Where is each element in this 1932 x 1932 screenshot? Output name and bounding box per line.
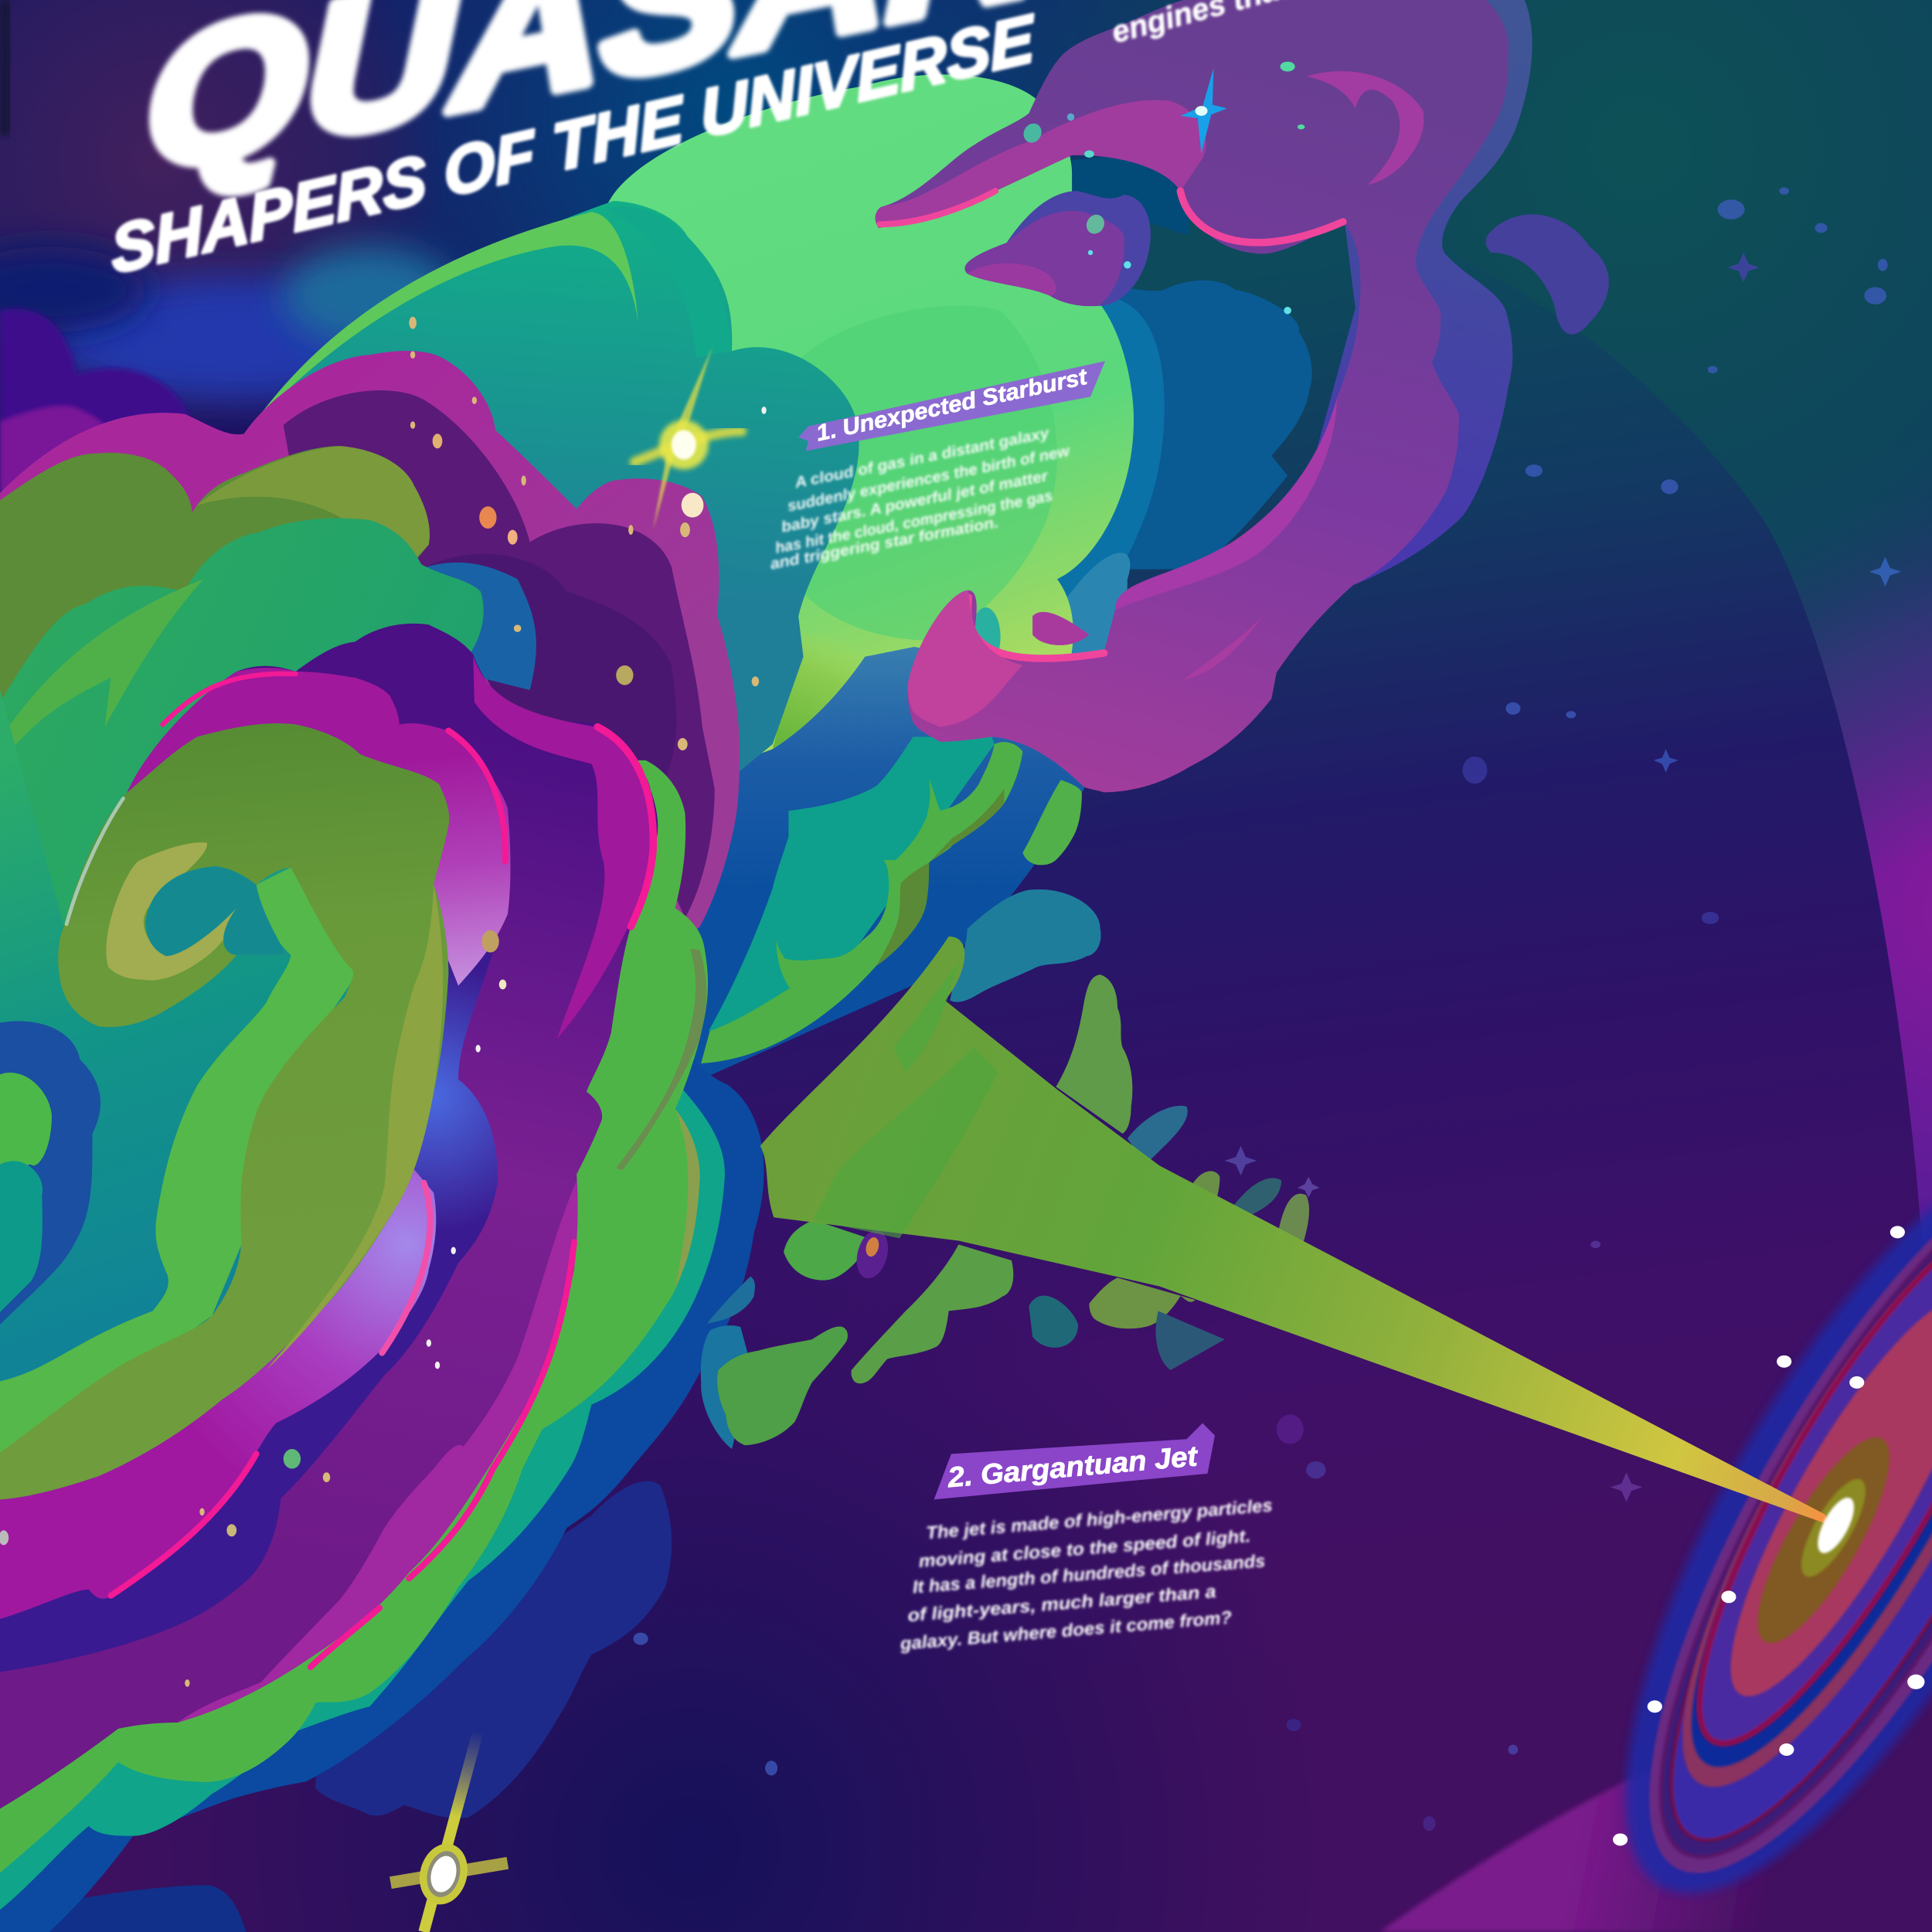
galaxy blue centre band (1637, 1190, 1932, 1804)
body text: unexpected starburst: and triggering star formation. (769, 514, 1000, 573)
cloud: small purple puff on the right (1486, 214, 1609, 335)
lower magenta ring (0, 1146, 436, 1619)
body text: gargantuan jet: galaxy. But where does it come from? (899, 1607, 1233, 1654)
crescent teal fill (709, 736, 995, 1032)
inner blue puff (0, 1021, 100, 1325)
galaxy nucleus and stars (1613, 1226, 1924, 1845)
cloud: blue haze behind title (0, 247, 456, 493)
crescent olive shadow (876, 862, 929, 966)
body text: gargantuan jet: of light-years, much larger than a (906, 1581, 1217, 1625)
subtitle: SHAPERS OF THE UNIVERSE (108, 1, 1039, 288)
scattered background stars (634, 187, 1901, 1831)
galaxy dark band (1587, 1118, 1932, 1908)
banner: gargantuan jet: 2. Gargantuan Jet (946, 1440, 1200, 1493)
icon: yellow star lower left (390, 1731, 508, 1932)
cloud: teal inner cloud (263, 201, 859, 771)
galaxy mauve ring (1569, 1102, 1932, 1929)
highlights: pink rim strokes (311, 727, 653, 1667)
inner teal puff (0, 1161, 43, 1312)
upper magenta ring (123, 668, 510, 986)
body text: unexpected starburst: A cloud of gas in a distant galaxy (793, 424, 1051, 492)
cloud: large light green starburst cloud (558, 74, 1134, 753)
cloud: outer blue layer (0, 961, 764, 1932)
teal swirl hole (145, 866, 286, 956)
pink highlight on side ring (448, 730, 505, 861)
galaxy (1535, 1077, 1932, 1932)
light olive overlay (266, 885, 443, 1370)
cloud: small puff below beak (964, 191, 1151, 306)
green body (0, 867, 357, 1466)
galaxy bright olive centre (1790, 1471, 1877, 1585)
small gas puffs around the jet (701, 889, 1309, 1449)
galaxy purple inner disc (1648, 1192, 1932, 1777)
body text: unexpected starburst: has hit the cloud, compressing the gas (774, 488, 1054, 557)
sphere base (0, 690, 449, 1499)
cloud: blue base beneath starburst cloud (690, 616, 1084, 1084)
body text: unexpected starburst: suddenly experiences the birth of new (786, 443, 1072, 515)
cloud: indigo band around the core (0, 862, 503, 1672)
inner green puff (0, 1073, 52, 1171)
olive core (0, 723, 449, 1499)
jet beam (760, 937, 1831, 1526)
cloud: blue mass right of green cloud (1057, 157, 1312, 654)
galaxy red ring (1623, 1174, 1932, 1828)
galaxy red core (1692, 1272, 1932, 1722)
galaxy blue-purple disc (1604, 1134, 1932, 1886)
cloud: fine gold dust particles (0, 250, 1291, 1687)
cloud: outer bottom indigo puff (0, 1481, 672, 1932)
panel: 1. unexpected starburst (769, 361, 1105, 573)
yellow swirl (106, 842, 236, 981)
pink highlight lower left (111, 1454, 257, 1596)
cloud: green crescent ring below starburst (701, 736, 1082, 1063)
pink highlight on top ring (162, 674, 296, 725)
cloud: magenta upper cloud (0, 351, 740, 986)
banner: gargantuan jet (934, 1423, 1215, 1499)
plume curled highlights (1306, 71, 1424, 185)
body text: unexpected starburst (769, 424, 1072, 573)
cloud: purple gas plume (875, 0, 1509, 792)
crescent green ring (701, 742, 1022, 1063)
sphere glass rim (66, 798, 123, 924)
cloud: green outer layer (0, 760, 708, 1872)
cloud: teal layer (0, 986, 725, 1910)
icon: blue star on plume (1180, 68, 1227, 154)
body text: unexpected starburst: baby stars. A powerful jet of matter (780, 468, 1050, 536)
pink highlight on lower ring (382, 1183, 430, 1353)
cloud: purple jet-shaped gas plume shadow (1317, 0, 1532, 586)
galaxy olive core (1735, 1421, 1912, 1658)
body text: gargantuan jet (899, 1495, 1274, 1654)
cloud: olive cloud behind the core (0, 446, 430, 740)
galaxy outer blue glow (1535, 1077, 1932, 1932)
icon: yellow star on starburst cloud (634, 348, 742, 530)
plume pink rim strokes (879, 191, 1343, 658)
panel: 2. gargantuan jet (899, 1423, 1274, 1654)
banner: unexpected starburst: 1. Unexpected Starburst (814, 364, 1090, 447)
body text: gargantuan jet: moving at close to the speed of light. (918, 1526, 1251, 1571)
cloud: magenta ring around the core (0, 668, 510, 1619)
plume beak highlight (875, 100, 1206, 228)
cloud core: translucent sphere (0, 690, 449, 1499)
cloud: green cloud inside magenta (0, 519, 530, 1109)
body text: gargantuan jet: The jet is made of high-energy particles (925, 1495, 1274, 1543)
body text: gargantuan jet: It has a length of hundreds of thousands (912, 1550, 1266, 1597)
plume body (876, 0, 1509, 792)
green puff beside crescent (1022, 780, 1082, 865)
cloud: purple outer ring (0, 624, 658, 1809)
